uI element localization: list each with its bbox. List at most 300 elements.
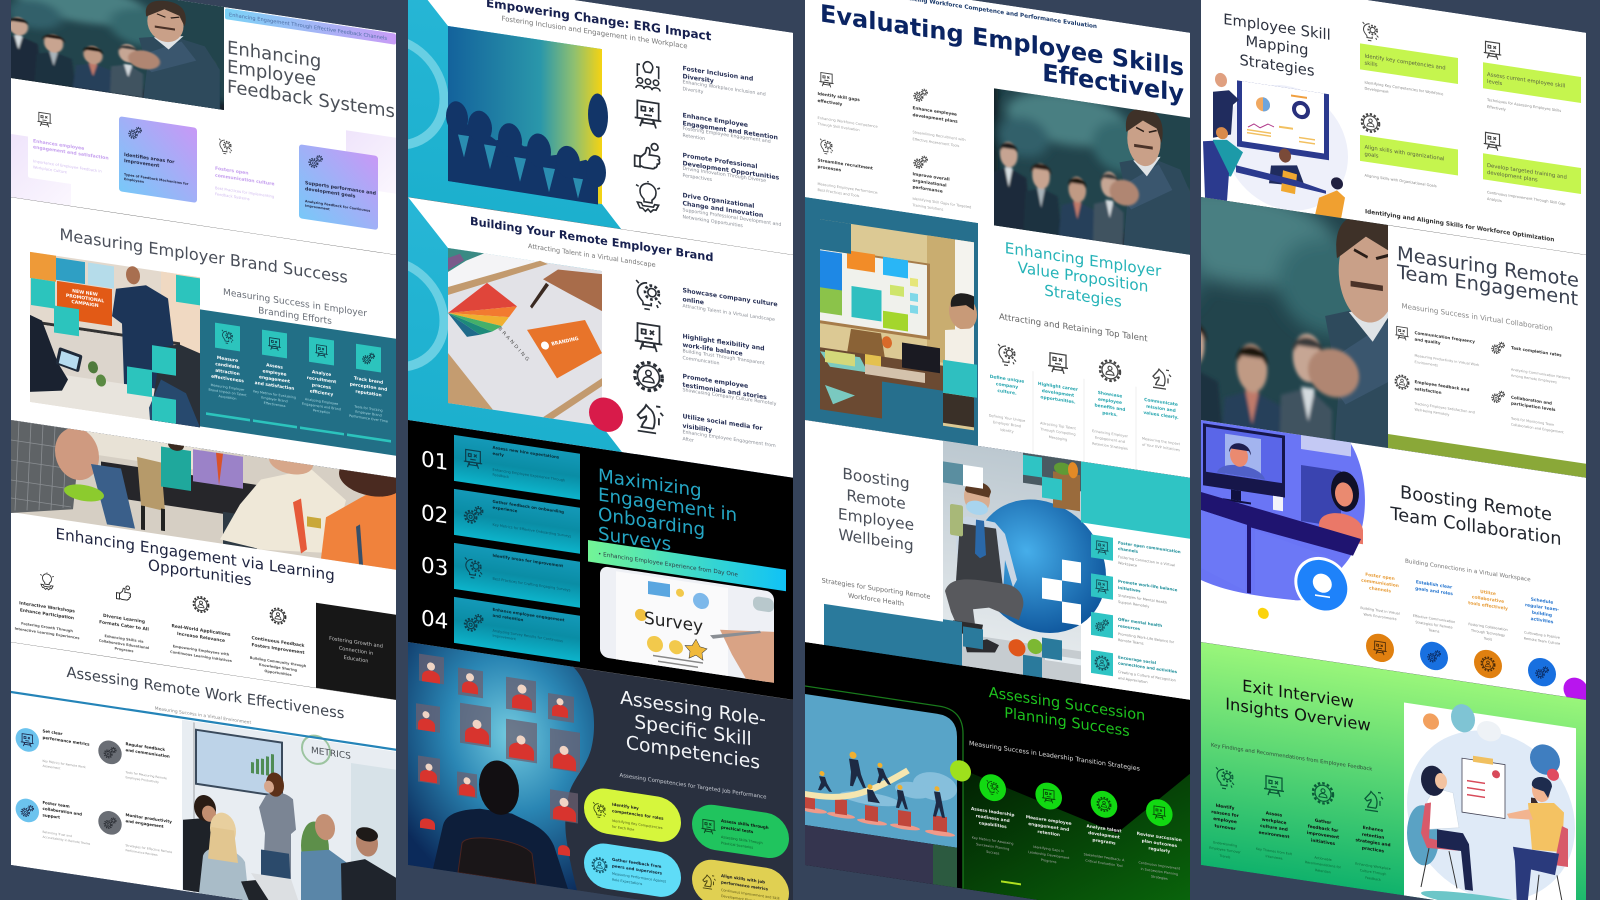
item: satisfaction: Well-being Remotely [1414, 408, 1449, 417]
item: skill gaps: Identify skill gaps [818, 91, 860, 102]
icon: board [1373, 641, 1387, 656]
item: current skill levels: Techniques for Assessing Employee Skills [1486, 98, 1561, 113]
title: Boosting Remote [1400, 482, 1552, 526]
item: task completion: Analyzing Communication Patterns [1511, 368, 1571, 380]
icon: bulb gear [465, 557, 482, 579]
item: turnover reasons: turnover [1214, 823, 1236, 832]
row: work-life balance: Strategies for Mental Health [1118, 593, 1167, 605]
subtitle: Measuring Success in Leadership Transition Strategies [969, 740, 1140, 773]
item: turnover reasons: Understanding [1213, 840, 1237, 848]
subtitle: Attracting and Retaining Top Talent [999, 312, 1148, 344]
column: collaborative tools: Tools [1483, 636, 1492, 642]
icon: chart board [1153, 806, 1166, 820]
row: mental health: Promoting Work-Life Balance for [1118, 632, 1175, 644]
step 01: Assess new hire expectations [492, 445, 560, 460]
item: benefits: Enhancing Employer [1092, 429, 1128, 439]
item: performance metrics: Key Metrics for Remote Work [43, 759, 86, 769]
item: development plans [912, 88, 966, 149]
title: Specific Skill [634, 711, 752, 751]
step: plan outcomes: plan outcomes [1142, 838, 1177, 849]
item: key competencies: Development [1364, 87, 1389, 94]
icon: bulb gear [222, 330, 233, 344]
item: retention strategies: retention [1362, 832, 1384, 841]
item: change: Networking Opportunities [682, 214, 743, 229]
item: define culture: Employer Brand [993, 420, 1021, 428]
item: define culture: culture. [997, 388, 1017, 397]
item: inclusion: Diversity [682, 86, 704, 95]
icon: chess knight [703, 874, 716, 890]
item: diverse formats: Formats Cater to All [99, 619, 149, 633]
item: performance metrics: Assessment [43, 764, 61, 771]
item: social media: Utilize social media for [682, 413, 763, 432]
item: change: Supporting Professional Development and [682, 207, 781, 228]
slide: Assessing Succession Planning Success [799, 641, 1190, 900]
slide: Assessing Role-Specific Skill Competencies [408, 642, 793, 900]
pill: practical tests [692, 802, 789, 861]
step: leadership readiness: Key Metrics for Assessing [972, 836, 1014, 846]
illustration: team climbing stepping stones [799, 685, 963, 889]
row: social connections: Encourage social [1118, 654, 1157, 665]
slide: Empowering Change ERG Impact [338, 0, 793, 256]
item: organizational performance: organizational [912, 178, 947, 188]
photo: manager pointing with team [994, 88, 1190, 255]
icon: bulb [40, 571, 54, 591]
item: engagement: Enhance Employee [682, 112, 748, 129]
item: monitor productivity: and engagement [126, 818, 164, 829]
callout: fostering growth: Fostering Growth and [329, 636, 383, 650]
photo: manager pointing with team [11, 0, 224, 110]
step: plan outcomes: Review succession [1137, 831, 1182, 844]
icon: bulb with people [636, 60, 660, 91]
item: current skill levels: Assess current employee skill [1487, 72, 1565, 90]
icon: bulb gear hand [636, 179, 660, 213]
row: open communication: Fostering Connection in a Virtual [1118, 555, 1175, 567]
step: employee engagement: Leadership Development [1028, 850, 1070, 860]
item: brand perception: reputation [355, 389, 382, 399]
item: recruitment efficiency: Analyzing Employee [305, 397, 338, 406]
item: benefits: employee [1098, 396, 1122, 406]
item: real-world applications: Increase Relevance [177, 631, 225, 644]
item: monitor productivity [98, 808, 172, 859]
item: retention strategies [1355, 789, 1391, 883]
step 04 [421, 592, 580, 662]
item: candidate attraction: Brand Impact on Talent [208, 388, 247, 397]
item: workplace culture: workplace [1262, 817, 1286, 826]
item: mission [1142, 367, 1181, 452]
step 02: experience [492, 505, 518, 513]
item: organizational performance: Identifying Skill Gaps for Targeted [912, 197, 971, 209]
column: clear goals: goals and roles [1415, 586, 1453, 597]
item: development: Perspectives [682, 173, 713, 183]
row: work-life balance [1091, 573, 1178, 613]
decorative ring [338, 252, 444, 374]
item: change: Change and Innovation [682, 200, 763, 219]
icon: chess knight [1153, 368, 1171, 390]
item: candidate attraction: candidate [215, 361, 240, 371]
item: define culture: Defining Your Unique [989, 414, 1025, 423]
icon: gears [21, 804, 33, 817]
subtitle: Workforce Health [848, 591, 904, 608]
item: turnover reasons: Identify [1216, 803, 1235, 812]
icon: gears [104, 817, 116, 829]
item: company culture: Showcase company culture [682, 287, 778, 308]
item: real-world applications: Empowering Employees with [173, 644, 230, 657]
item: satisfaction: satisfaction [1414, 386, 1442, 395]
title: Strategies [1044, 281, 1122, 311]
item: team collaboration: Accountability in Remote Teams [43, 835, 91, 846]
item: diverse formats: Programs [115, 647, 133, 653]
step 04: Analyzing Survey Results for Continuous [492, 629, 563, 643]
row: open communication [1091, 534, 1181, 574]
illustration: video call in circular blob [1201, 420, 1365, 612]
item: improvement initiatives: Recommendations for [1305, 860, 1342, 870]
icon: gears [1536, 666, 1548, 679]
item: fosters open communication: Fosters open [215, 166, 249, 177]
icon: bulb gear [636, 280, 661, 311]
badge: globe [1294, 553, 1350, 617]
item: benefits: benefits and [1095, 402, 1125, 413]
item: development plans: Enhance employee [912, 105, 957, 117]
item: employee engagement: Effectiveness [264, 401, 286, 408]
accent line [11, 692, 396, 750]
title: Employee Skill [1223, 11, 1331, 44]
row: work-life balance: initiatives [1118, 585, 1141, 593]
item: development: Promote Professional [682, 152, 757, 170]
item: improvement initiatives: feedback for [1308, 824, 1339, 834]
item: career development [1038, 351, 1079, 444]
pill: job metrics [692, 857, 789, 900]
title: Enhancing Employer [1005, 239, 1162, 281]
item: flexibility: Building Trust Through Transparent [682, 348, 765, 367]
item: candidate attraction: Measure [217, 355, 238, 364]
item: recruitment efficiency: process [312, 382, 331, 391]
panel: metrics [200, 309, 396, 456]
decorative checker squares [943, 443, 1081, 685]
item: fosters open communication: Feedback Systems [215, 192, 250, 201]
decorative ring [338, 30, 444, 152]
photo: brand presentation meeting: NEW NEW [72, 288, 98, 298]
item: retention strategies: strategies and [1355, 837, 1391, 848]
item: improvement initiatives: improvement [1307, 830, 1339, 841]
icon: gear [592, 857, 607, 873]
image: branding desk: BRANDING [551, 336, 580, 348]
subtitle: Assessing Competencies for Targeted Job Performance [620, 773, 767, 801]
item: continuous feedback: Fosters Improvement [252, 642, 304, 656]
step: employee engagement: engagement and [1028, 821, 1069, 833]
item: company culture: Attracting Talent in a Virtual Landscape [682, 303, 775, 323]
icon: board [819, 72, 834, 88]
icon: ring gear [1095, 655, 1109, 671]
item: real-world applications: Real-World Applications [172, 623, 231, 638]
step: plan outcomes: Continuous Improvement [1138, 861, 1181, 871]
icon: bulb gear [1363, 22, 1378, 42]
column: collaborative tools: Through Technology [1470, 628, 1505, 638]
item: career development: Through Compelling [1039, 427, 1076, 437]
item: targeted training: Develop targeted training and [1487, 163, 1567, 181]
item: define culture: Identity [1000, 428, 1014, 434]
photo: brand presentation meeting: CAMPAIGN [71, 299, 99, 309]
item: engagement: Retention [682, 133, 705, 142]
step: employee engagement: retention [1037, 829, 1060, 838]
title: Building Your Remote Employer Brand [470, 214, 713, 264]
title: Assessing Remote Work Effectiveness [66, 664, 344, 722]
item: improvement initiatives: Retention [1315, 868, 1331, 874]
item: candidate attraction: effectiveness [211, 374, 244, 384]
illustration: exit interview conversation [1404, 695, 1576, 900]
row: social connections: connections and activities [1118, 660, 1178, 674]
column: team-building: Cultivating a Positive [1524, 630, 1560, 640]
item: recruitment: Best Practices and Tools [817, 188, 860, 198]
item: employee engagement: Employer Brand [261, 396, 288, 403]
item: real-world applications [170, 592, 232, 663]
subtitle ribbon: Enhancing Engagement Through Effective Feedback Channels [229, 12, 387, 42]
item: inclusion: Enhancing Workplace Inclusion and [682, 79, 766, 98]
step 01: Enhancing Employee Experience Through [492, 468, 565, 483]
row: social connections [1091, 650, 1178, 689]
item: testimonials: Showcasing Company Culture Remotely [682, 387, 777, 407]
pill: peer feedback: Gather feedback from [612, 857, 661, 869]
photo: sticky-note planning wall [820, 219, 977, 446]
item: monitor productivity: Performance Reviews [126, 848, 158, 857]
item: company culture: online [682, 296, 704, 306]
step: talent development: Stakeholder Feedback: A [1084, 852, 1125, 863]
decorative yellow dot [1258, 607, 1269, 620]
item: benefits [1092, 358, 1128, 451]
icon: bulb gear [1216, 767, 1234, 790]
slide: Enhancing Engagement via Learning Opportunities [11, 406, 403, 702]
item: workplace culture: Assess [1266, 810, 1283, 819]
title: Strategies [1239, 52, 1315, 80]
card: identifies areas: Types of Feedback Mechanisms for [124, 172, 189, 186]
item: career development: Messaging [1049, 435, 1067, 442]
pill: practical tests: Assessing Skills Through [721, 835, 763, 845]
row: open communication: Workspace [1118, 561, 1137, 568]
subtitle: Branding Efforts [258, 306, 332, 327]
title: Onboarding [598, 504, 705, 541]
icon: clipboard [315, 345, 328, 358]
item: retention strategies: practices [1362, 845, 1384, 855]
item: brand perception: Performance Over Time [349, 414, 388, 424]
icon: document [1095, 580, 1109, 594]
item: interactive workshops: Interactive Learning Experiences [15, 627, 79, 640]
card: identifies areas: Improvement [124, 158, 160, 169]
icon: thumb [116, 584, 130, 601]
step: talent development [1084, 788, 1125, 869]
item: candidate attraction: Acquisition [219, 394, 236, 401]
title: Mapping [1245, 33, 1309, 59]
item: workplace culture: Interviews [1266, 854, 1283, 861]
photo: wellness seated man with ball [943, 441, 1106, 689]
image: branding desk: BRANDING [497, 326, 532, 364]
item: flexibility: Highlight flexibility and [682, 333, 765, 352]
title: Assessing Role- [620, 687, 766, 731]
title: Evaluating Employee Skills [820, 0, 1184, 82]
icon: gear person [1313, 782, 1333, 805]
step 03: 03 [421, 553, 448, 582]
item: improvement initiatives [1305, 781, 1342, 876]
item: participation: Collaboration and Engagement [1511, 423, 1564, 434]
callout: fostering growth: Connection in [339, 646, 373, 657]
title: Team Engagement [1396, 260, 1578, 311]
item: skill gaps [817, 72, 878, 135]
subtitle ribbon [588, 540, 786, 591]
title: Assessing Succession [989, 684, 1145, 725]
item: workplace culture: environment [1259, 830, 1289, 840]
card: supports performance: Improvement [305, 204, 330, 211]
item: retention strategies: Enhancing Workplace [1355, 862, 1391, 871]
subtitle: Measuring Success in Virtual Collaboration [1402, 301, 1553, 333]
row: mental health: resources [1118, 623, 1141, 631]
item: career development: Attracting Top Talent [1040, 421, 1076, 431]
card: supports performance: Analyzing Feedback for Continuous [305, 199, 370, 213]
item: turnover reasons [1209, 766, 1241, 861]
item: benefits: Retention Strategies [1092, 442, 1128, 451]
item: task completion: Task completion rates [1511, 345, 1562, 358]
item: targeted training: Continuous Improvement Through Skill Gap [1487, 190, 1566, 206]
item: current skill levels: Effectively [1487, 105, 1507, 112]
column: collaborative tools: collaborative [1472, 594, 1504, 605]
pill: practical tests: practical tests [721, 824, 754, 834]
pill: practical tests: Assess skills through [721, 818, 769, 830]
row: mental health: Remote Teams [1118, 638, 1144, 646]
item: regular feedback: Tools for Measuring Remote [125, 770, 167, 780]
item: communication: Measuring Productivity in Virtual Work [1414, 354, 1479, 367]
icon: board [464, 449, 482, 469]
item: regular feedback: Employee Productivity [126, 775, 159, 784]
pill: key competencies: for Each Role [612, 825, 634, 832]
item: development: Driving Innovation Through Diverse [682, 166, 766, 184]
icon: bulb gear [219, 139, 232, 155]
decorative tint panels [11, 130, 396, 206]
item: communication [1395, 326, 1479, 374]
icon: training board [635, 100, 661, 129]
item: key competencies: Identify key competencies and [1364, 54, 1446, 72]
item: flexibility: work-life balance [682, 342, 743, 358]
icon: ring gear [1481, 656, 1495, 672]
photo: close-up manager pointing [1201, 197, 1388, 448]
icon: board [1095, 541, 1109, 555]
step: talent development: Analyze talent [1087, 823, 1121, 834]
title: Measuring Employer Brand Success [60, 225, 348, 287]
item: organizational performance: performance [912, 184, 943, 194]
item: current skill levels [1483, 41, 1581, 123]
icon: gear person [1100, 359, 1120, 382]
title: Surveys [598, 524, 671, 555]
item: change [636, 179, 781, 235]
icon: board [1484, 41, 1501, 60]
column: team-building: activities [1531, 616, 1554, 625]
dark teal side panel [805, 197, 978, 446]
column: open channels: Work Environments [1363, 612, 1397, 621]
item: retention strategies: Enhance [1363, 825, 1383, 834]
item: social media: Enhancing Employee Engagement from [682, 429, 776, 449]
title: Enhancing [227, 37, 321, 73]
column: team-building: Remote Team Culture [1524, 636, 1560, 646]
item: communication: and quality [1414, 337, 1441, 345]
callout: fostering growth: Education [344, 655, 368, 665]
item: team collaboration: Foster team [43, 800, 70, 809]
item: performance metrics [16, 724, 90, 775]
icon: gear person [194, 596, 208, 613]
item: enhances employee engagement: engagement and satisfaction [33, 144, 109, 162]
pill: peer feedback: peers and supervisors [612, 863, 663, 876]
item: candidate attraction: attraction [215, 368, 240, 377]
step: leadership readiness: readiness and [976, 813, 1010, 824]
item: team collaboration: collaboration and [43, 806, 82, 817]
item: mission: of Your EVP Initiatives [1142, 443, 1180, 452]
accent circle [950, 759, 971, 783]
title: Exit Interview [1242, 676, 1354, 712]
pill: key competencies: Identifying Key Competencies [612, 819, 663, 830]
item: recruitment: Measuring Employee Performance: [818, 182, 878, 195]
step 04: Enhance employee engagement [492, 607, 565, 622]
subtitle: Strategies for Supporting Remote [822, 577, 930, 601]
item: fosters open communication: Best Practices for Implementing [215, 186, 275, 199]
icon: ring gear [1395, 374, 1409, 390]
card: identifies areas [119, 116, 197, 203]
item: participation [1492, 390, 1564, 434]
item: candidate attraction: Measuring Employer [211, 383, 245, 392]
step: leadership readiness: Succession Planning [976, 842, 1009, 851]
slide: Boosting Remote Employee Wellbeing [805, 420, 1190, 701]
step 03 [421, 538, 580, 608]
step: plan outcomes: regularly [1148, 846, 1170, 855]
item: benefits: Showcase [1098, 390, 1122, 400]
item: enhances employee engagement: Enhances employee [33, 138, 84, 152]
card: supports performance: Supports performance and [305, 180, 376, 197]
image: survey sheet [600, 566, 774, 683]
pill: job metrics: performance metrics [721, 879, 769, 892]
row: mental health [1091, 612, 1175, 650]
callout: fostering growth [316, 603, 396, 701]
row: social connections: and Appreciation [1118, 676, 1148, 684]
item: current skill levels: levels [1487, 79, 1503, 87]
icon: gears [914, 88, 927, 102]
column: clear goals: Establish clear [1416, 579, 1453, 591]
column: team-building [1524, 595, 1560, 689]
column: collaborative tools [1468, 587, 1508, 681]
icon: bulb gear [593, 802, 606, 818]
step: employee engagement [1026, 779, 1072, 866]
title: Planning Success [1004, 704, 1130, 740]
item: communication: Communication frequency [1414, 330, 1475, 344]
icon: chess knight [638, 404, 663, 434]
item: organizational goals: goals [1364, 152, 1379, 160]
icon: chess knight [1365, 791, 1383, 812]
item: targeted training: development plans [1487, 170, 1538, 184]
column: open channels: communication [1361, 578, 1399, 589]
item: turnover reasons: Employee Turnover [1209, 846, 1241, 855]
title: Boosting [842, 465, 910, 493]
item: enhances employee engagement: Importance of Employee Feedback in [33, 159, 102, 174]
pill: key competencies [584, 785, 681, 845]
item: social media: visibility [682, 423, 712, 434]
row: work-life balance: Support Remotely [1118, 600, 1149, 609]
slide: Enhancing Employer Value Proposition Strategies [805, 197, 1190, 478]
image: branding desk [448, 247, 623, 434]
slide: Maximizing Engagement in Onboarding Surveys [408, 420, 793, 701]
item: flexibility: Communication [682, 355, 719, 367]
item: targeted training: Analysis [1487, 197, 1502, 203]
item: interactive workshops: Interactive Workshops [19, 600, 75, 615]
item: recruitment efficiency [300, 335, 344, 436]
column: clear goals: Effective Communication [1413, 614, 1455, 624]
item: recruitment efficiency: Perception [313, 408, 330, 415]
slide: Measuring Remote Team Engagement [1090, 140, 1586, 548]
item: social media: After [682, 436, 694, 444]
title: Value Proposition [1018, 258, 1148, 296]
item: interactive workshops: Enhance Participation [20, 607, 74, 621]
